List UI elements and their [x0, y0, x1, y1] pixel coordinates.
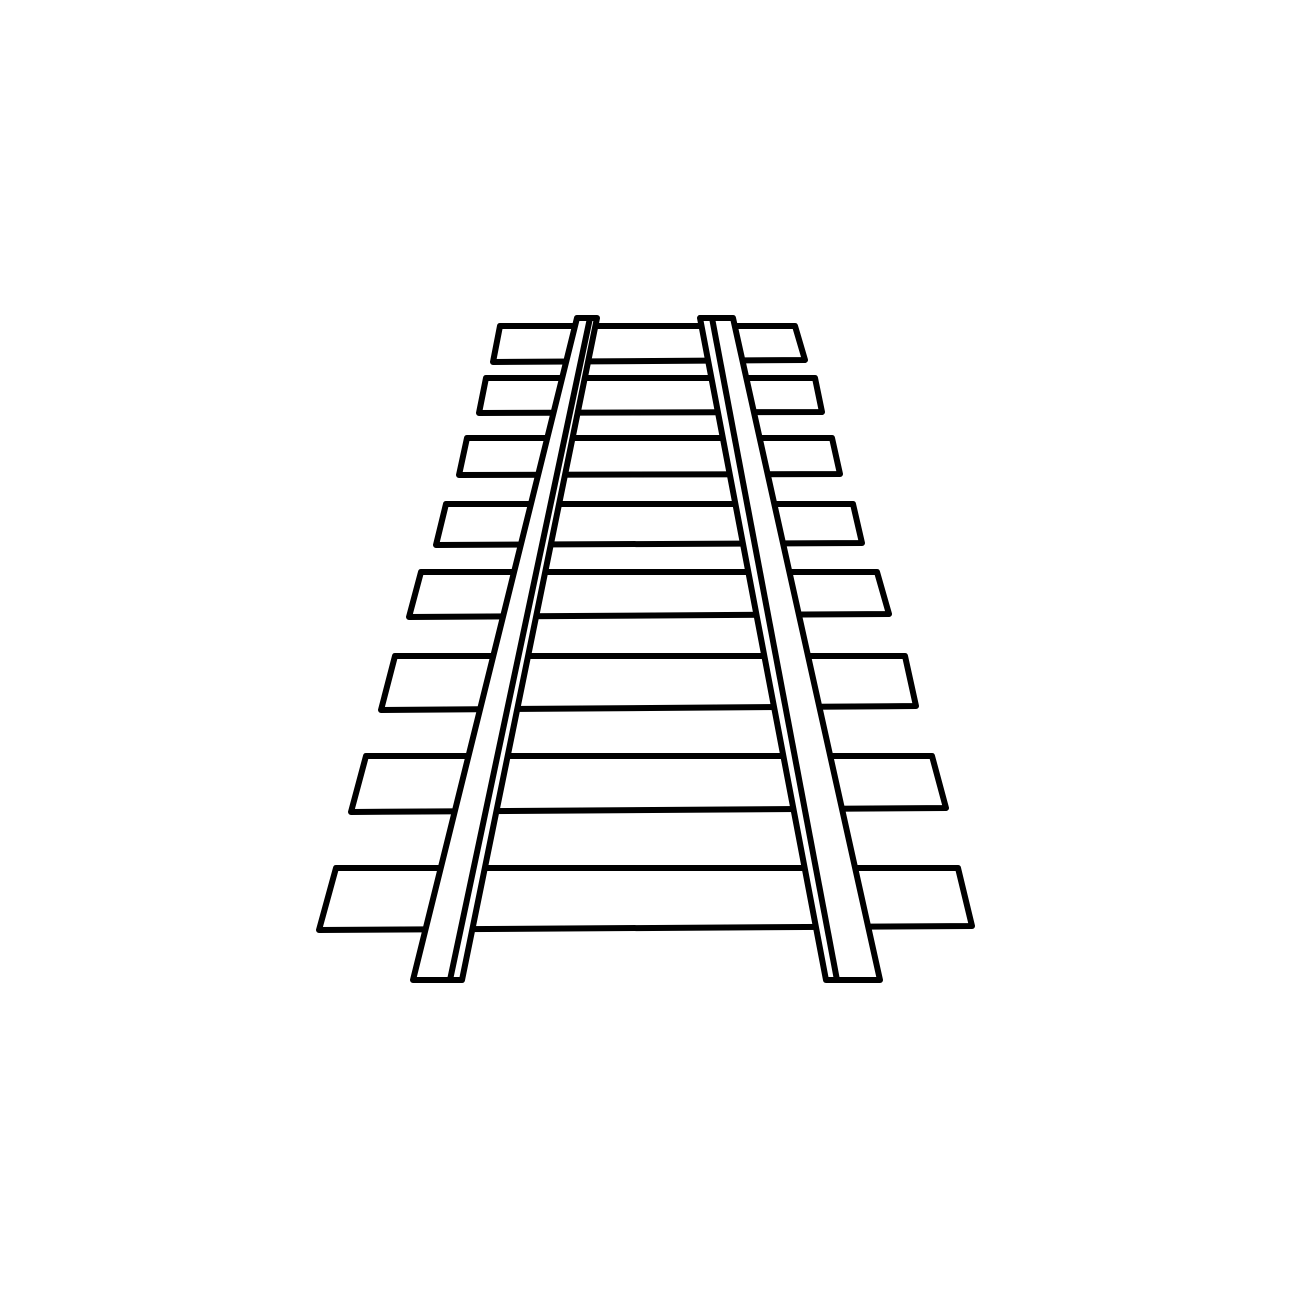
left rail — [413, 318, 597, 980]
sleepers — [319, 326, 972, 930]
railroad track drawing — [319, 318, 972, 980]
right rail — [700, 318, 880, 980]
